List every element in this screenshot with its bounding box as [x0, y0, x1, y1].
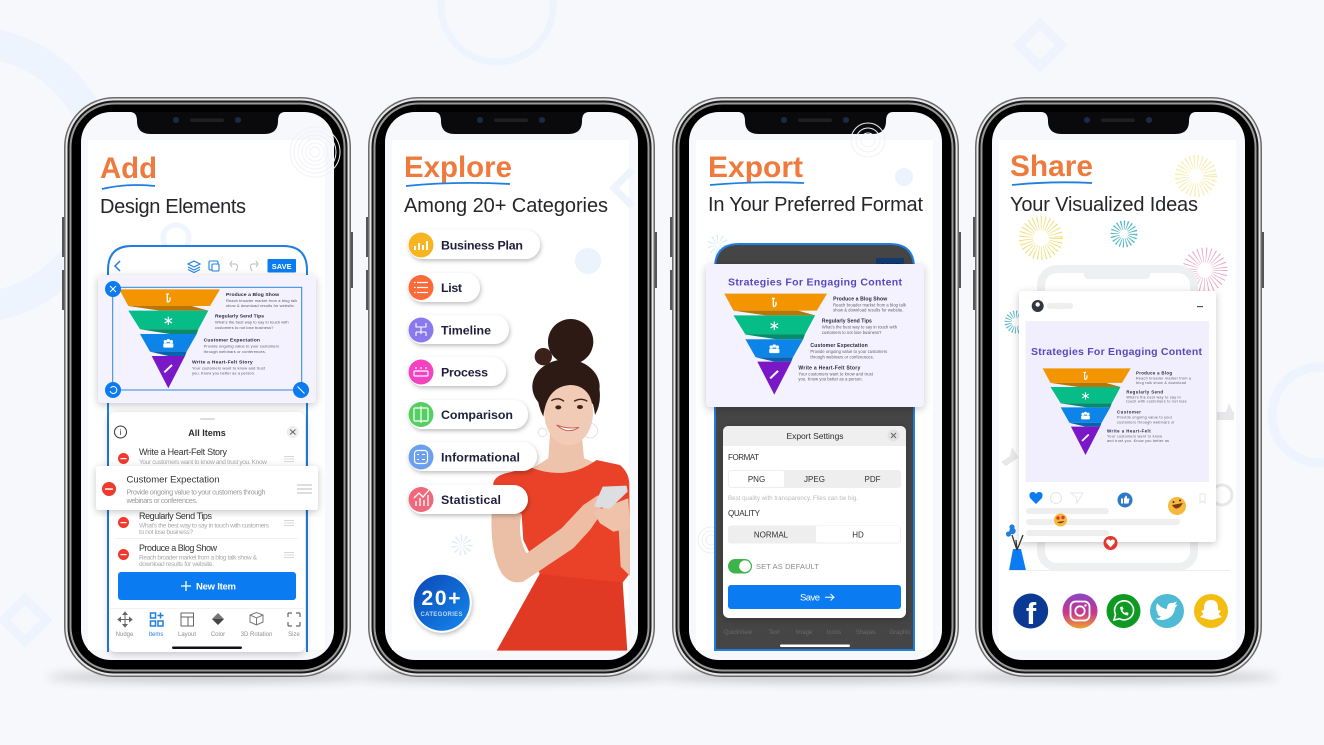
tab bar: Nudge — [116, 632, 134, 638]
highlighted list item: webinars or conferences. — [126, 496, 198, 505]
earrings — [583, 423, 598, 438]
new item button: New Item — [196, 582, 236, 592]
list row: produce a blog show — [118, 543, 294, 568]
list row: regularly send tips — [115, 511, 298, 538]
funnel labels: Produce a Blog Show — [833, 296, 887, 302]
post title: Strategies For Engaging Content — [1031, 346, 1202, 358]
funnel labels: Provide ongoing value to your customers — [810, 349, 887, 354]
heading: Add: Add — [100, 152, 157, 185]
like badge — [1118, 492, 1132, 508]
star decoration — [456, 539, 468, 551]
save button: Save — [800, 592, 820, 604]
subheading: Among 20+ Categories — [404, 195, 608, 217]
funnel labels: Produce a Blog Show — [226, 292, 279, 298]
eyes — [555, 405, 561, 409]
funnel labels — [798, 296, 907, 382]
phone 2: Explore — [366, 97, 657, 677]
category: Timeline — [408, 315, 509, 344]
funnel labels: What's the best way to say in touch with — [215, 320, 289, 325]
funnel labels: blog talk show & download — [1136, 381, 1186, 385]
concentric decoration — [851, 123, 885, 157]
handle: rotate — [105, 382, 121, 398]
format selector: PDF — [864, 475, 881, 484]
heart badge — [1104, 536, 1118, 550]
funnel labels: What's the best way to say in — [1126, 395, 1181, 399]
ring decoration — [163, 225, 189, 251]
smile — [557, 425, 579, 431]
toolbar: SAVE — [272, 262, 292, 271]
infographic card — [706, 264, 924, 407]
quality selector — [728, 526, 901, 544]
badge: 20+ categories: 20+ — [422, 587, 460, 610]
phone 1: Add — [62, 97, 353, 677]
category: Informational — [408, 442, 537, 471]
toolbar — [115, 259, 296, 272]
dress top — [492, 460, 630, 583]
category: Comparison: Comparison — [441, 408, 513, 422]
phone frame — [366, 97, 657, 677]
phone frame — [62, 97, 353, 677]
tab bar: 3D Rotation — [241, 632, 272, 638]
icon: snapchat — [1194, 594, 1228, 628]
category: List — [408, 273, 480, 302]
category: Statistical — [408, 485, 528, 514]
highlighted list item — [96, 466, 318, 510]
phone frame — [670, 97, 961, 677]
post image — [1026, 321, 1209, 482]
export settings dialog: SET AS DEFAULT — [756, 562, 819, 571]
heading: Explore: Explore — [404, 151, 512, 184]
highlighted list item: Customer Expectation — [126, 474, 220, 486]
hair bun — [548, 319, 593, 364]
export settings dialog — [723, 426, 906, 618]
funnel labels: through webinars or conferences. — [810, 355, 874, 360]
list row: regularly send tips: to not lose business? — [139, 529, 193, 536]
underline — [1012, 182, 1092, 185]
emoji: heart eyes — [1054, 514, 1067, 526]
funnel labels: you. Know you better as a person. — [798, 377, 863, 382]
tab bar — [116, 612, 300, 638]
funnel labels: Regularly Send Tips — [822, 319, 872, 325]
concentric decoration — [290, 127, 340, 177]
subheading: Your Visualized Ideas — [1010, 194, 1198, 216]
funnel labels: Write a Heart-Felt — [1107, 428, 1151, 433]
phone 4: Share — [973, 97, 1264, 677]
left arm — [491, 513, 573, 582]
funnel labels: Your customers want to know and trust — [192, 365, 266, 370]
list row: heart-felt story — [118, 447, 294, 466]
background phone — [1037, 265, 1198, 571]
category: Process: Process — [441, 366, 488, 380]
tab bar: Items — [149, 632, 163, 638]
phone floor shadows — [47, 672, 1278, 682]
list row: produce a blog show: Produce a Blog Show — [139, 543, 218, 553]
face — [544, 380, 593, 445]
funnel labels: Produce a Blog — [1136, 370, 1172, 375]
soft circle decoration — [575, 248, 601, 274]
export settings dialog: FORMAT — [728, 453, 759, 462]
funnel labels: touch with customers to not lose — [1126, 400, 1187, 404]
funnel labels — [192, 292, 297, 376]
list row: produce a blog show: Reach broader market from a blog talk show & — [139, 554, 258, 562]
funnel labels: Customer Expectation — [204, 338, 260, 344]
dim tab labels: Shapes — [856, 630, 876, 636]
dim tab labels: QuickView — [724, 630, 753, 636]
funnel labels: and trust you. Know you better as — [1107, 439, 1169, 443]
funnel graphic — [119, 289, 220, 388]
funnel labels: What's the best way to say in touch with — [822, 325, 897, 330]
home indicator — [172, 646, 242, 649]
category: Business Plan: Business Plan — [441, 238, 523, 252]
category: Comparison — [408, 400, 528, 429]
export settings dialog: QUALITY — [728, 509, 761, 518]
card title: Strategies For Engaging Content — [728, 276, 902, 288]
quality selector: NORMAL — [754, 530, 789, 540]
funnel labels: Your customers want to know — [1107, 435, 1162, 439]
funnel labels: show & download results for website. — [833, 308, 904, 313]
icon: twitter — [1150, 594, 1184, 628]
caption bars — [1026, 508, 1180, 536]
list row: produce a blog show: download results for website. — [139, 561, 214, 568]
post actions — [1029, 492, 1205, 504]
funnel labels: Write a Heart-Felt Story — [798, 365, 860, 371]
funnel labels: Reach broader market from a — [1136, 377, 1192, 381]
funnel graphic — [724, 294, 827, 395]
post header — [1032, 300, 1203, 312]
format selector: PNG — [748, 475, 765, 484]
funnel labels: customers through webinars or — [1117, 420, 1175, 424]
list row: regularly send tips: Regularly Send Tips — [139, 511, 212, 521]
funnel labels: Customer Expectation — [810, 343, 868, 349]
dim tab labels — [724, 630, 911, 636]
subheading: Design Elements — [100, 196, 246, 218]
category: Statistical: Statistical — [441, 493, 501, 507]
diamond decoration — [614, 170, 632, 206]
dark app mock — [715, 244, 914, 650]
dark app mock: SAVE — [880, 261, 900, 270]
toggle — [728, 559, 752, 574]
format selector: JPEG — [804, 475, 825, 484]
hair back — [532, 359, 600, 414]
thumbs decorations — [1001, 403, 1234, 505]
funnel labels: Regularly Send — [1126, 389, 1163, 394]
phone — [594, 486, 628, 509]
underline — [710, 182, 804, 185]
save button — [728, 585, 901, 609]
badge: 20+ categories — [412, 573, 472, 633]
infographic card — [98, 275, 316, 403]
dim tab labels: Text — [768, 630, 780, 636]
funnel labels — [1107, 370, 1192, 443]
soft circle decoration — [895, 168, 913, 186]
category: Process — [408, 357, 506, 386]
bottom sheet: All Items — [188, 428, 226, 438]
format selector — [728, 470, 901, 488]
dim tab labels: Image — [796, 630, 813, 636]
icon: whatsapp — [1106, 594, 1140, 628]
funnel labels: customers to not lose business? — [215, 325, 274, 330]
funnel labels: show & download results for website. — [226, 303, 295, 308]
hand — [560, 495, 602, 548]
list row: heart-felt story: Write a Heart-Felt Story — [139, 447, 228, 457]
concentric decoration low — [698, 527, 724, 553]
woman illustration — [491, 319, 630, 651]
funnel labels: Write a Heart-Felt Story — [192, 360, 253, 366]
underline — [406, 183, 510, 186]
badge: 20+ categories: CATEGORIES — [420, 612, 462, 618]
funnel labels: through webinars or conferences. — [204, 349, 266, 354]
funnel labels: Your customers want to know and trust — [798, 371, 874, 376]
fireworks — [1008, 162, 1220, 330]
quality selector: HD — [852, 530, 864, 540]
new item button — [118, 572, 296, 600]
icon: facebook: f — [1026, 596, 1037, 631]
icon: instagram — [1062, 594, 1098, 628]
neck — [530, 433, 600, 483]
hand two — [593, 498, 630, 532]
skirt — [497, 573, 627, 651]
handle: resize — [293, 382, 309, 398]
highlighted list item: Provide ongoing value to your customers through — [126, 488, 266, 496]
app mock outline — [108, 246, 307, 652]
emoji: laughing — [1168, 497, 1186, 515]
fringe — [537, 367, 600, 417]
tab bar: Size — [288, 632, 300, 638]
category: List: List — [441, 281, 462, 295]
tab bar: Layout — [178, 632, 196, 638]
tab bar: Color — [211, 632, 225, 638]
list row: regularly send tips: What's the best way to say in touch with customers — [139, 522, 270, 530]
selection box — [113, 287, 302, 390]
funnel labels: Customer — [1117, 410, 1141, 415]
vase with flowers — [1006, 524, 1026, 570]
category: Business Plan — [408, 230, 540, 259]
phone frame — [973, 97, 1264, 677]
bottom sheet: i — [120, 428, 122, 437]
phone 3: Export — [670, 97, 961, 677]
subheading: In Your Preferred Format — [708, 194, 923, 216]
heading: Export: Export — [708, 151, 803, 184]
funnel labels: Reach broader market from a blog talk — [226, 298, 297, 303]
heading: Share: Share — [1010, 150, 1093, 183]
underline — [102, 185, 155, 189]
handle: close — [105, 281, 121, 297]
category: Timeline: Timeline — [441, 324, 491, 338]
funnel labels: Reach broader market from a blog talk — [833, 303, 907, 308]
bottom sheet — [109, 412, 305, 652]
funnel labels: Regularly Send Tips — [215, 314, 264, 320]
list row: heart-felt story: Your customers want to know and trust you. Know — [139, 459, 267, 466]
category: Informational: Informational — [441, 450, 520, 464]
icon: facebook — [1013, 594, 1048, 631]
funnel labels: customers to not lose business? — [822, 330, 882, 335]
dim tab labels: Icons — [827, 630, 841, 636]
funnel graphic — [1043, 368, 1131, 455]
export settings dialog: Best quality with transparency. Files can be big. — [728, 495, 858, 502]
dim tab labels: Graphic — [889, 630, 911, 636]
export settings dialog: Export Settings — [786, 431, 844, 441]
social post card — [1019, 291, 1216, 542]
funnel labels: you. Know you better as a person. — [192, 371, 255, 376]
funnel labels: Provide ongoing value to your — [1117, 416, 1173, 420]
funnel labels: Provide ongoing value to your customers — [204, 344, 279, 349]
star decoration — [712, 239, 724, 251]
right forearm — [618, 517, 630, 576]
